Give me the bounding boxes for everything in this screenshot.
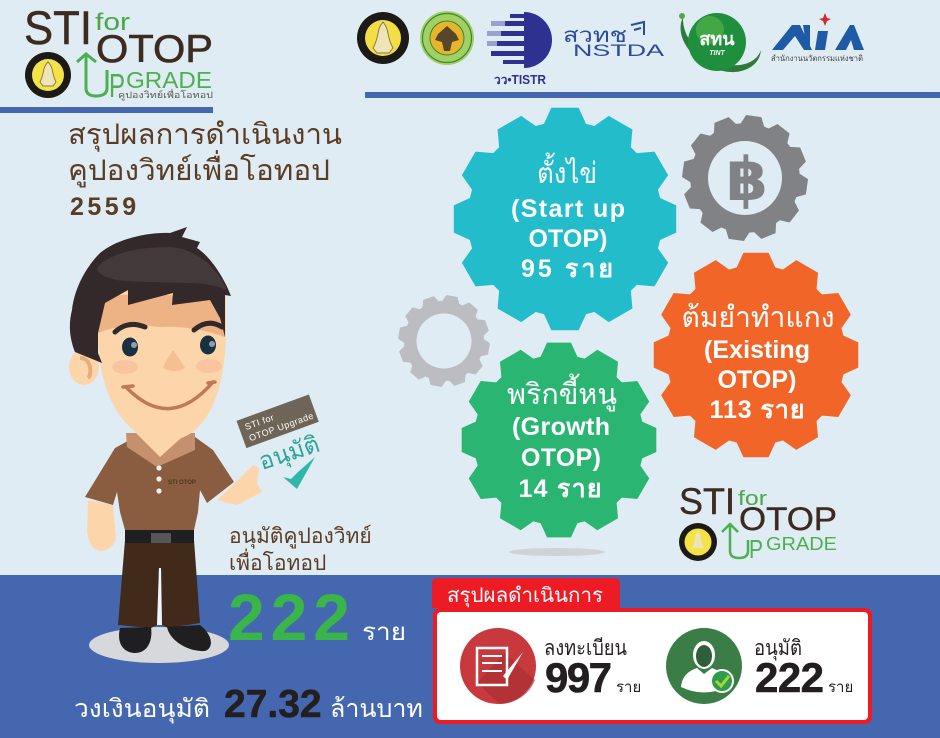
icon: register [460, 628, 536, 704]
logo: lower STI for OTOP: OTOP [739, 501, 837, 537]
logo: lower STI for OTOP: P [749, 534, 763, 564]
left arm [87, 500, 116, 551]
gear: Existing OTOP [654, 253, 858, 457]
logo: STI for OTOP Upgrade: GRADE [126, 67, 212, 93]
money gear [674, 107, 816, 249]
nose [163, 350, 185, 371]
stat: approved [754, 637, 853, 701]
panel: summary [432, 578, 872, 724]
gear: Existing OTOP: 113 ราย [710, 396, 804, 424]
eyes [122, 336, 216, 356]
neck [133, 430, 190, 457]
collar [126, 433, 195, 467]
ground shadow [89, 627, 229, 663]
icon: seal [25, 52, 71, 98]
face [98, 290, 226, 441]
logo: ministry seal [357, 12, 409, 64]
logo: NSTDA [563, 22, 665, 60]
logo: STI for OTOP Upgrade [24, 1, 213, 104]
logo: NIA: สำนักงานนวัตกรรมแห่งชาติ [771, 54, 863, 63]
gear shadow [509, 548, 605, 556]
shoes [119, 625, 211, 653]
logo: lower STI for OTOP: for [738, 488, 767, 510]
gear: Growth OTOP: 14 ราย [518, 475, 602, 503]
budget line: วงเงินอนุมัติ [74, 695, 210, 724]
gear: Growth OTOP: (Growth [512, 413, 610, 441]
approved stamp: อนุมัติ [256, 431, 323, 477]
logo: STI for OTOP Upgrade: OTOP [96, 28, 213, 71]
logo: STI for OTOP Upgrade: STI [24, 1, 92, 54]
logo: TISTR [487, 12, 552, 87]
ear [69, 349, 99, 385]
gear: Start up OTOP: ตั้งไข่ [537, 152, 597, 190]
logo: NSTDA: สวทช [563, 25, 627, 47]
logo: NSTDA: NSTDA [573, 41, 665, 60]
card: STI for OTOP Upgrade [237, 395, 319, 448]
budget line: 27.32 [224, 683, 322, 726]
logo: NIA [771, 13, 864, 63]
gear: Start up OTOP: 95 ราย [521, 255, 613, 283]
bottom blue band [0, 575, 940, 738]
eyebrows [115, 323, 222, 332]
panel heading: สรุปผลดำเนินการ [447, 585, 603, 608]
title: 2559 [70, 193, 140, 221]
character [69, 227, 262, 653]
logo: STI for OTOP Upgrade: for [95, 9, 130, 36]
belt [125, 530, 194, 543]
approved heading: อนุมัติคูปองวิทย์ [229, 524, 372, 549]
header rule right [365, 92, 940, 98]
logo: lower STI for OTOP [679, 481, 837, 564]
cheeks [112, 359, 222, 374]
card: STI for OTOP Upgrade: OTOP Upgrade [248, 410, 315, 443]
gear: Growth OTOP: OTOP) [521, 444, 601, 472]
stat: registered [544, 637, 641, 701]
logo: TINT: TINT [709, 50, 725, 57]
small gear [391, 288, 497, 394]
approved heading [229, 524, 372, 575]
hair [70, 227, 231, 363]
logo: lower STI for OTOP: GRADE [766, 534, 837, 554]
unit: ราย [362, 619, 406, 646]
shirt [85, 437, 234, 530]
trousers [118, 540, 200, 628]
shirt logo: STI OTOP [168, 480, 196, 486]
gear: Existing OTOP: OTOP) [718, 366, 796, 394]
stat: approved: 222 [755, 654, 824, 701]
budget line: ล้านบาท [330, 695, 423, 723]
icon: approved person [666, 628, 742, 704]
gear: Growth OTOP [462, 343, 656, 537]
forehead shadow [98, 295, 225, 337]
money gear: ฿ [726, 146, 768, 213]
stat: registered: 997 [545, 654, 612, 701]
approved heading: เพื่อโอทอป [229, 548, 326, 575]
gear: Existing OTOP: ต้มยำทำแกง [682, 302, 834, 334]
logo: STI for OTOP Upgrade: คูปองวิทย์เพื่อโอทอป [118, 88, 213, 101]
logo: TINT: สทน [699, 29, 735, 49]
gear: Existing OTOP: (Existing [704, 336, 810, 364]
logo: STI for OTOP Upgrade: P [109, 67, 125, 104]
logo: TISTR: วว•TISTR [494, 73, 546, 87]
stat: registered: ราย [616, 679, 641, 696]
stat: approved: อนุมัติ [754, 637, 802, 661]
budget line [74, 683, 423, 726]
logo: TINT [679, 13, 761, 72]
gear: Start up OTOP: (Start up [511, 195, 625, 223]
right arm and thumb [217, 465, 262, 505]
trouser gap [157, 568, 162, 625]
title: คูปองวิทย์เพื่อโอทอป [68, 150, 330, 188]
stat: registered: ลงทะเบียน [544, 637, 627, 660]
logo: lower STI for OTOP: STI [679, 481, 735, 522]
gear: Start up OTOP [454, 108, 676, 330]
title: สรุปผลการดำเนินงาน [68, 119, 342, 152]
gear: Start up OTOP: OTOP) [528, 225, 608, 253]
partner logos [357, 11, 864, 87]
gear: Growth OTOP: พริกขี้หนู [507, 373, 617, 412]
card: STI for OTOP Upgrade: STI for [244, 412, 276, 432]
stat: approved: ราย [828, 679, 853, 696]
shirt buttons [156, 465, 162, 494]
stat: 222: 222 [228, 580, 350, 654]
logo: department of science service [420, 11, 474, 65]
title [68, 119, 342, 221]
header rule left [0, 107, 213, 113]
smile [123, 382, 215, 409]
